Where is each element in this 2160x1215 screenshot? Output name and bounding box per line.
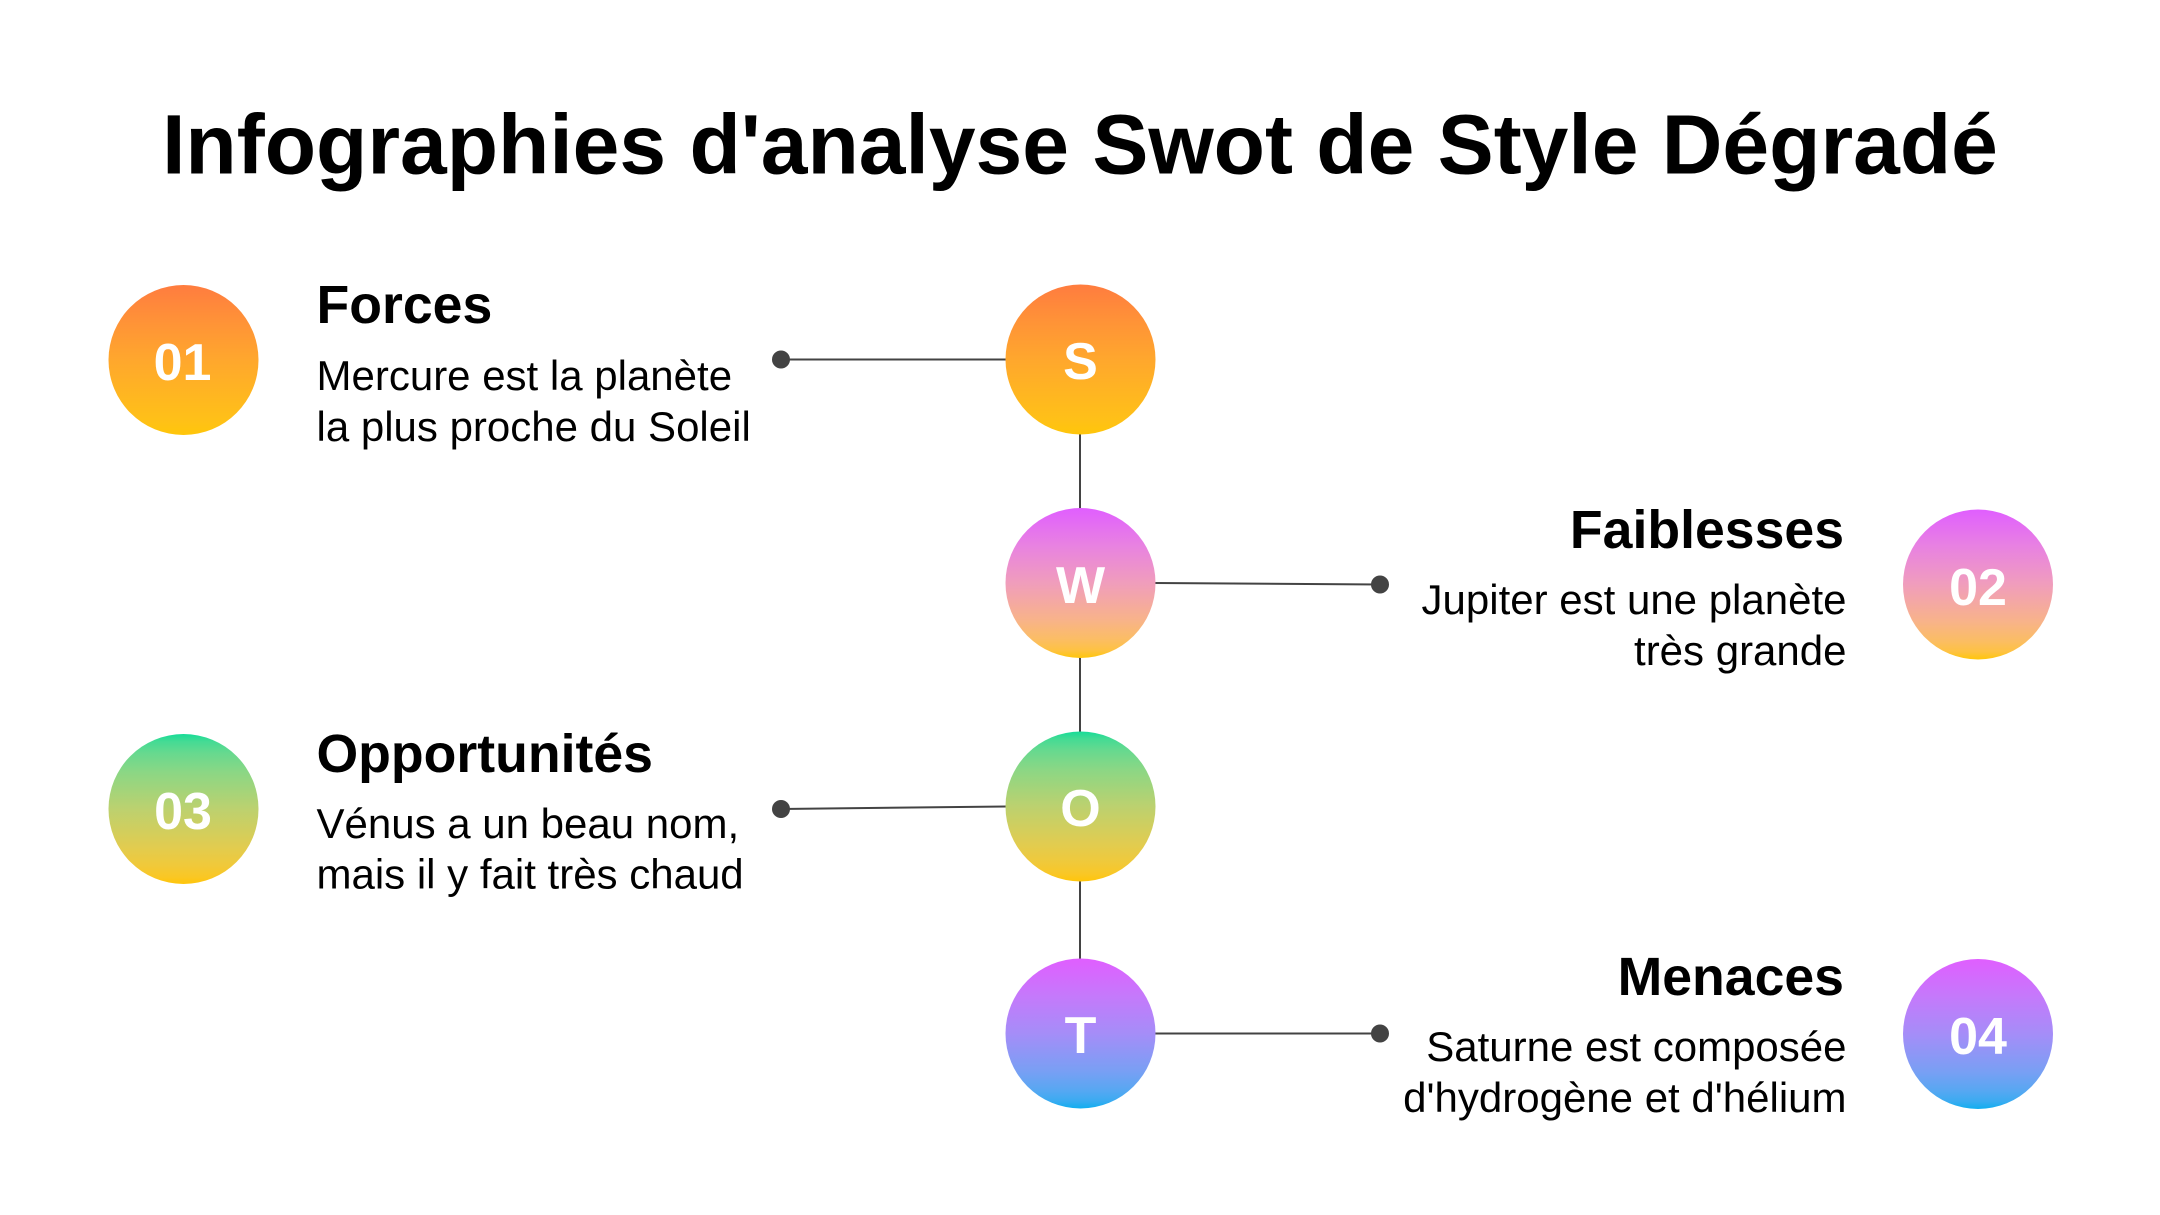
node: T: T: [1065, 1007, 1097, 1065]
node: S: [1006, 284, 1156, 434]
vertical connector: [1079, 359, 1081, 1033]
panel: opportunites: [108, 724, 744, 898]
heading: opportunites: Opportunités: [316, 724, 653, 784]
text: faiblesses description: très grande: [1634, 627, 1846, 674]
panel: forces: [108, 275, 751, 450]
node: O: [1006, 732, 1156, 882]
badge: 01: [108, 285, 258, 435]
connector: S: [772, 350, 1006, 368]
panel: faiblesses: [1422, 500, 2053, 674]
badge: 01: 01: [154, 334, 211, 392]
node: W: W: [1056, 557, 1106, 615]
text: faiblesses description: Jupiter est une planète: [1422, 576, 1846, 623]
heading: forces: Forces: [316, 275, 492, 335]
text: forces description: Mercure est la planète: [316, 352, 732, 399]
node: T: [1006, 958, 1156, 1108]
heading: menaces: Menaces: [1618, 947, 1844, 1007]
badge: 04: 04: [1949, 1008, 2007, 1066]
badge: 04: [1903, 959, 2053, 1109]
badge: 03: [108, 734, 258, 884]
text: opportunites description: Vénus a un beau nom,: [316, 800, 739, 847]
title: Infographies d'analyse Swot de Style Dégradé: [162, 98, 1998, 192]
node: O: O: [1060, 780, 1101, 838]
connector: W: [1155, 576, 1389, 594]
text: menaces description: d'hydrogène et d'hélium: [1403, 1074, 1846, 1121]
panel: menaces: [1403, 947, 2053, 1121]
node: W: [1006, 508, 1156, 658]
badge: 03: 03: [154, 783, 212, 841]
text: menaces description: Saturne est composée: [1426, 1023, 1846, 1070]
text: forces description: la plus proche du Soleil: [316, 403, 751, 450]
text: opportunites description: mais il y fait très chaud: [316, 850, 744, 898]
connector: T: [1155, 1024, 1389, 1042]
node: S: S: [1063, 333, 1098, 391]
connector: O: [772, 800, 1006, 818]
badge: 02: 02: [1949, 559, 2007, 617]
badge: 02: [1903, 510, 2053, 660]
heading: faiblesses: Faiblesses: [1570, 500, 1844, 560]
